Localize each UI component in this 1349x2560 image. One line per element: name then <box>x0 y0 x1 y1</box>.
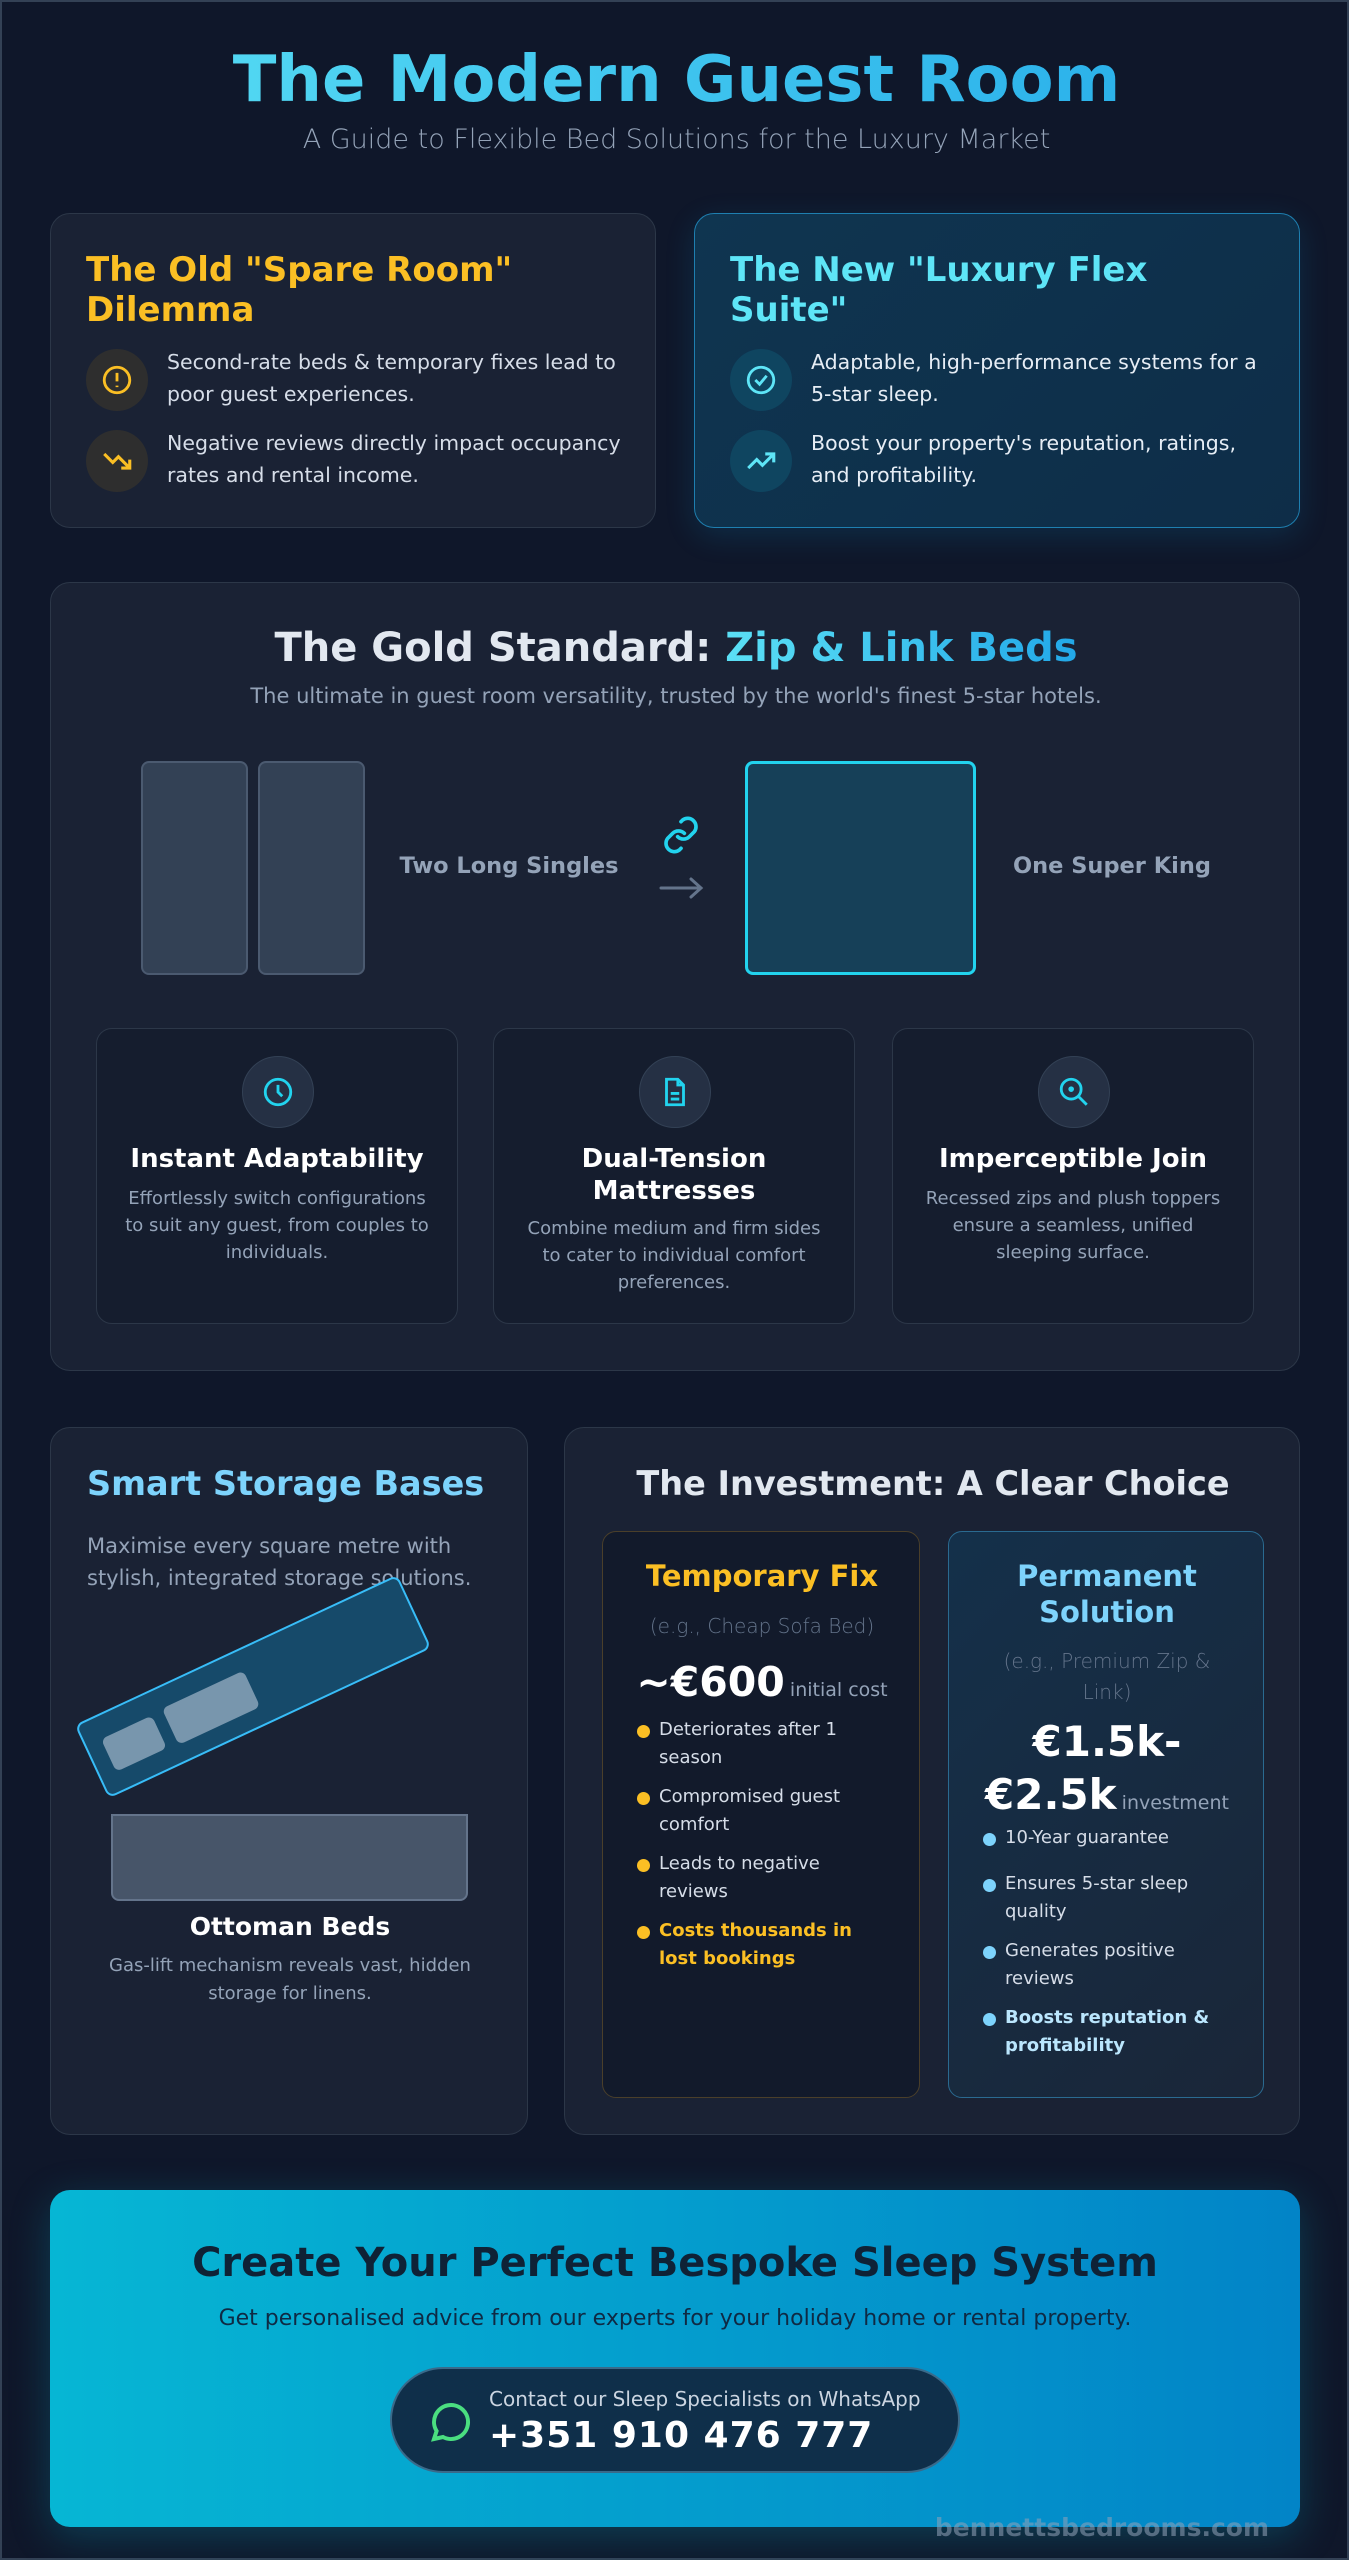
phone number: +351 910 476 777 <box>489 2415 873 2456</box>
icon: check <box>730 349 792 411</box>
text: point 1: Second-rate beds & temporary fixes lead to poor guest experiences. <box>167 350 616 406</box>
bullets: 10-Year guarantee <box>1005 1827 1169 1848</box>
title: Mattresses <box>593 1176 755 1206</box>
price: ~€600 initial cost <box>636 1658 888 1706</box>
icon: whatsapp <box>431 2403 470 2442</box>
label: one super king: One Super King <box>1013 853 1211 879</box>
title <box>582 1144 766 1206</box>
card: permanent solution <box>948 1531 1264 2098</box>
icon: trend down <box>86 430 148 492</box>
icon: document <box>639 1056 711 1128</box>
bullets: Costs thousands in lost bookings <box>659 1920 852 1969</box>
bullets <box>983 1827 1209 2056</box>
price <box>984 1717 1229 1819</box>
text: point 1: Adaptable, high-performance systems for a 5-star sleep. <box>811 350 1257 406</box>
title: Temporary Fix <box>646 1559 878 1593</box>
description: Effortlessly switch configurations to suit any guest, from couples to individuals. <box>125 1188 429 1263</box>
illustration: ottoman <box>77 1577 468 1901</box>
description: ottoman: Gas-lift mechanism reveals vast, hidden storage for linens. <box>109 1955 471 2004</box>
description: Recessed zips and plush toppers ensure a seamless, unified sleeping surface. <box>926 1188 1220 1263</box>
label: two long singles: Two Long Singles <box>399 853 619 879</box>
title: Imperceptible Join <box>939 1144 1207 1174</box>
panel: investment <box>564 1427 1300 2135</box>
heading: Dilemma <box>86 290 254 330</box>
price: €2.5k investment <box>985 1770 1229 1819</box>
label: ottoman beds: Ottoman Beds <box>190 1912 390 1941</box>
whatsapp button <box>390 2367 960 2473</box>
title: Dual-Tension <box>582 1144 766 1174</box>
feature card: imperceptible join <box>892 1028 1254 1324</box>
panel: old spare room <box>50 213 656 528</box>
text: point 2: Negative reviews directly impact occupancy rates and rental income. <box>167 431 621 487</box>
title: Instant Adaptability <box>130 1144 424 1174</box>
illustration: two singles <box>141 761 365 975</box>
bullets: Deteriorates after 1 season <box>659 1719 837 1768</box>
panel: smart storage <box>50 1427 528 2135</box>
bullets: Compromised guest comfort <box>659 1786 840 1835</box>
price: €1.5k- <box>1032 1717 1182 1766</box>
heading <box>730 250 1147 330</box>
title <box>1017 1559 1197 1629</box>
bullets: Boosts reputation & profitability <box>1005 2007 1209 2056</box>
card: temporary fix <box>602 1531 920 2098</box>
footer: website: bennettsbedrooms.com <box>935 2513 1269 2542</box>
arrow <box>660 877 703 899</box>
panel: call to action <box>50 2190 1300 2527</box>
subtitle: A Guide to Flexible Bed Solutions for the Luxury Market <box>303 124 1050 155</box>
heading: Smart Storage Bases <box>87 1464 484 1503</box>
icon: clock <box>242 1056 314 1128</box>
heading <box>86 250 512 330</box>
title: The Modern Guest Room <box>233 43 1120 117</box>
description: Maximise every square metre with stylish, integrated storage solutions. <box>87 1534 471 1590</box>
contact text: Contact our Sleep Specialists on WhatsApp <box>489 2387 921 2411</box>
description: Combine medium and firm sides to cater to individual comfort preferences. <box>528 1218 820 1293</box>
bullets <box>637 1719 852 1969</box>
panel: new luxury flex suite <box>694 213 1300 528</box>
icon: link <box>664 816 698 854</box>
title: Permanent <box>1017 1559 1197 1593</box>
icon: trend up <box>730 430 792 492</box>
heading: The Old "Spare Room" <box>86 250 512 290</box>
bullets: Generates positive reviews <box>1005 1940 1175 1989</box>
heading: The Gold Standard: Zip & Link Beds <box>274 625 1078 671</box>
feature card: dual tension <box>493 1028 855 1324</box>
subheading: Get personalised advice from our experts for your holiday home or rental property. <box>219 2306 1131 2331</box>
text: point 2: Boost your property's reputation, ratings, and profitability. <box>811 431 1236 487</box>
panel: gold standard <box>50 582 1300 1371</box>
heading: The Investment: A Clear Choice <box>636 1464 1230 1503</box>
feature card: instant adaptability <box>96 1028 458 1324</box>
title <box>2 38 1349 122</box>
heading: The New "Luxury Flex <box>730 250 1147 290</box>
heading: Create Your Perfect Bespoke Sleep System <box>192 2240 1158 2286</box>
bullets: Ensures 5-star sleep quality <box>1005 1873 1188 1922</box>
bullets: Leads to negative reviews <box>659 1853 820 1902</box>
heading: Suite" <box>730 290 847 330</box>
example: (e.g., Cheap Sofa Bed) <box>650 1614 874 1638</box>
title: Solution <box>1039 1595 1175 1629</box>
example: (e.g., Premium Zip & Link) <box>1004 1649 1210 1704</box>
icon: search <box>1038 1056 1110 1128</box>
icon: warning <box>86 349 148 411</box>
subheading: The ultimate in guest room versatility, trusted by the world's finest 5-star hotels. <box>250 684 1102 708</box>
illustration: super king <box>745 761 976 975</box>
